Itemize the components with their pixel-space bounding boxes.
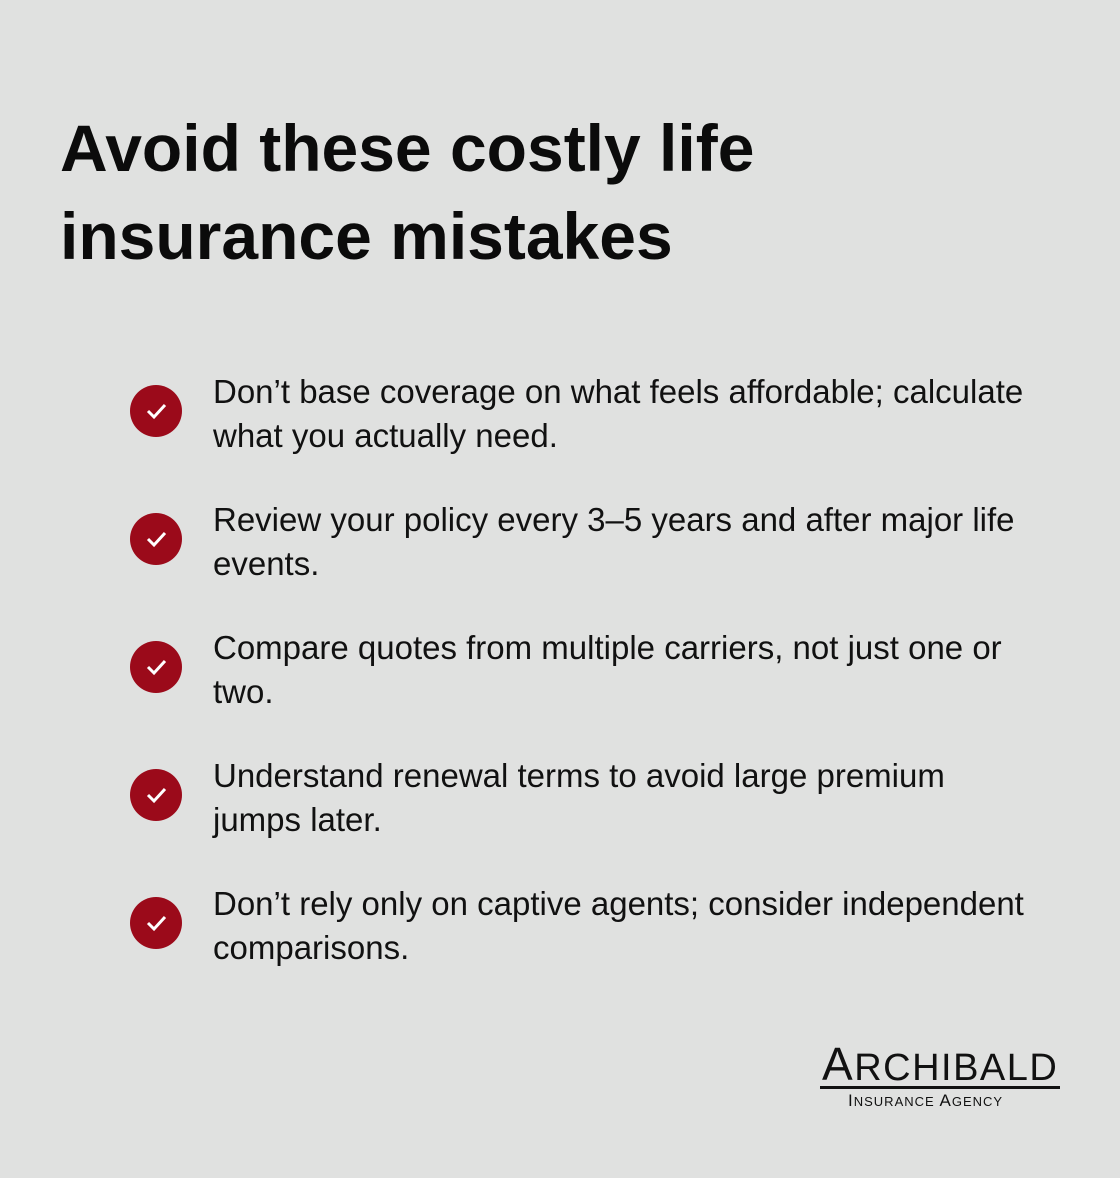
text 2: Review your policy every 3–5 years and after major life events. xyxy=(213,501,1015,582)
icon: check xyxy=(130,897,182,949)
title: Avoid these costly life xyxy=(60,111,754,185)
item 2 xyxy=(130,501,1015,582)
text 4: Understand renewal terms to avoid large premium jumps later. xyxy=(213,757,945,838)
text 3: Compare quotes from multiple carriers, not just one or two. xyxy=(213,629,1002,710)
icon: check xyxy=(130,769,182,821)
item 4 xyxy=(130,757,945,838)
title xyxy=(60,111,754,273)
text 1: Don’t base coverage on what feels affordable; calculate what you actually need. xyxy=(213,373,1023,454)
item 5 xyxy=(130,885,1024,966)
item 1 xyxy=(130,373,1023,454)
title: insurance mistakes xyxy=(60,199,673,273)
icon: check xyxy=(130,385,182,437)
icon: check xyxy=(130,513,182,565)
item 3 xyxy=(130,629,1002,710)
logo: ARCHIBALD xyxy=(822,1038,1058,1090)
text 5: Don’t rely only on captive agents; consider independent comparisons. xyxy=(213,885,1024,966)
icon: check xyxy=(130,641,182,693)
logo: INSURANCE AGENCY xyxy=(848,1091,1003,1110)
